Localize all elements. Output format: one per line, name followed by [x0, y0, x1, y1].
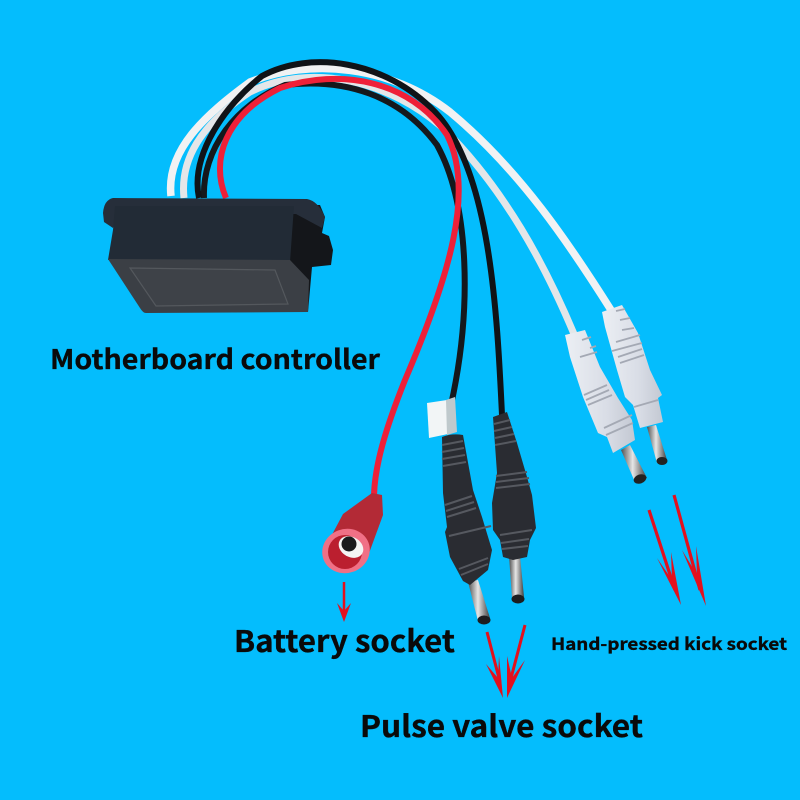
hand-pressed plug left	[565, 330, 648, 485]
body	[602, 305, 663, 428]
pulse plug left	[442, 434, 492, 624]
body	[442, 434, 492, 585]
body	[565, 330, 635, 453]
box top flange	[103, 198, 325, 228]
label: motherboard controller: Motherboard controller	[50, 338, 380, 377]
pin tip	[632, 473, 648, 485]
grips	[580, 337, 633, 435]
white label on wire	[427, 397, 457, 438]
pin	[468, 580, 490, 621]
box right clip	[288, 205, 333, 312]
pulse plug right	[492, 412, 536, 604]
socket strain relief	[326, 493, 383, 556]
box base inner outline	[130, 268, 288, 306]
wires	[171, 62, 611, 495]
battery socket	[316, 493, 383, 580]
socket rim	[316, 522, 376, 580]
pin tip	[512, 594, 524, 604]
body	[492, 412, 536, 560]
hand-pressed plug right	[602, 305, 668, 465]
pin	[621, 445, 647, 482]
arrows: hand-pressed kick socket	[649, 495, 706, 606]
wire: white to left hand-pressed plug	[184, 77, 574, 334]
label: pulse valve socket: Pulse valve socket	[360, 702, 643, 746]
socket inside	[328, 535, 362, 569]
wire: black to left pulse plug	[204, 83, 465, 405]
socket pin	[342, 536, 356, 552]
arrows: pulse valve socket	[486, 625, 525, 698]
pin tip	[656, 457, 668, 465]
box front side	[108, 206, 294, 262]
wire: red to battery socket	[220, 79, 459, 495]
label: battery socket: Battery socket	[234, 617, 455, 661]
grips	[612, 309, 658, 407]
wire: white to right hand-pressed plug	[171, 69, 611, 310]
pin	[509, 556, 524, 598]
socket white insert	[335, 532, 367, 562]
box base face	[108, 259, 309, 313]
wire: black to right pulse plug	[198, 62, 502, 415]
arrow: battery socket	[337, 582, 351, 622]
pin	[647, 425, 667, 463]
grips	[494, 420, 532, 549]
pin tip	[478, 616, 490, 624]
label: hand-pressed kick socket: Hand-pressed kick socket	[551, 630, 787, 655]
controller box	[103, 198, 333, 313]
grips	[442, 441, 491, 575]
